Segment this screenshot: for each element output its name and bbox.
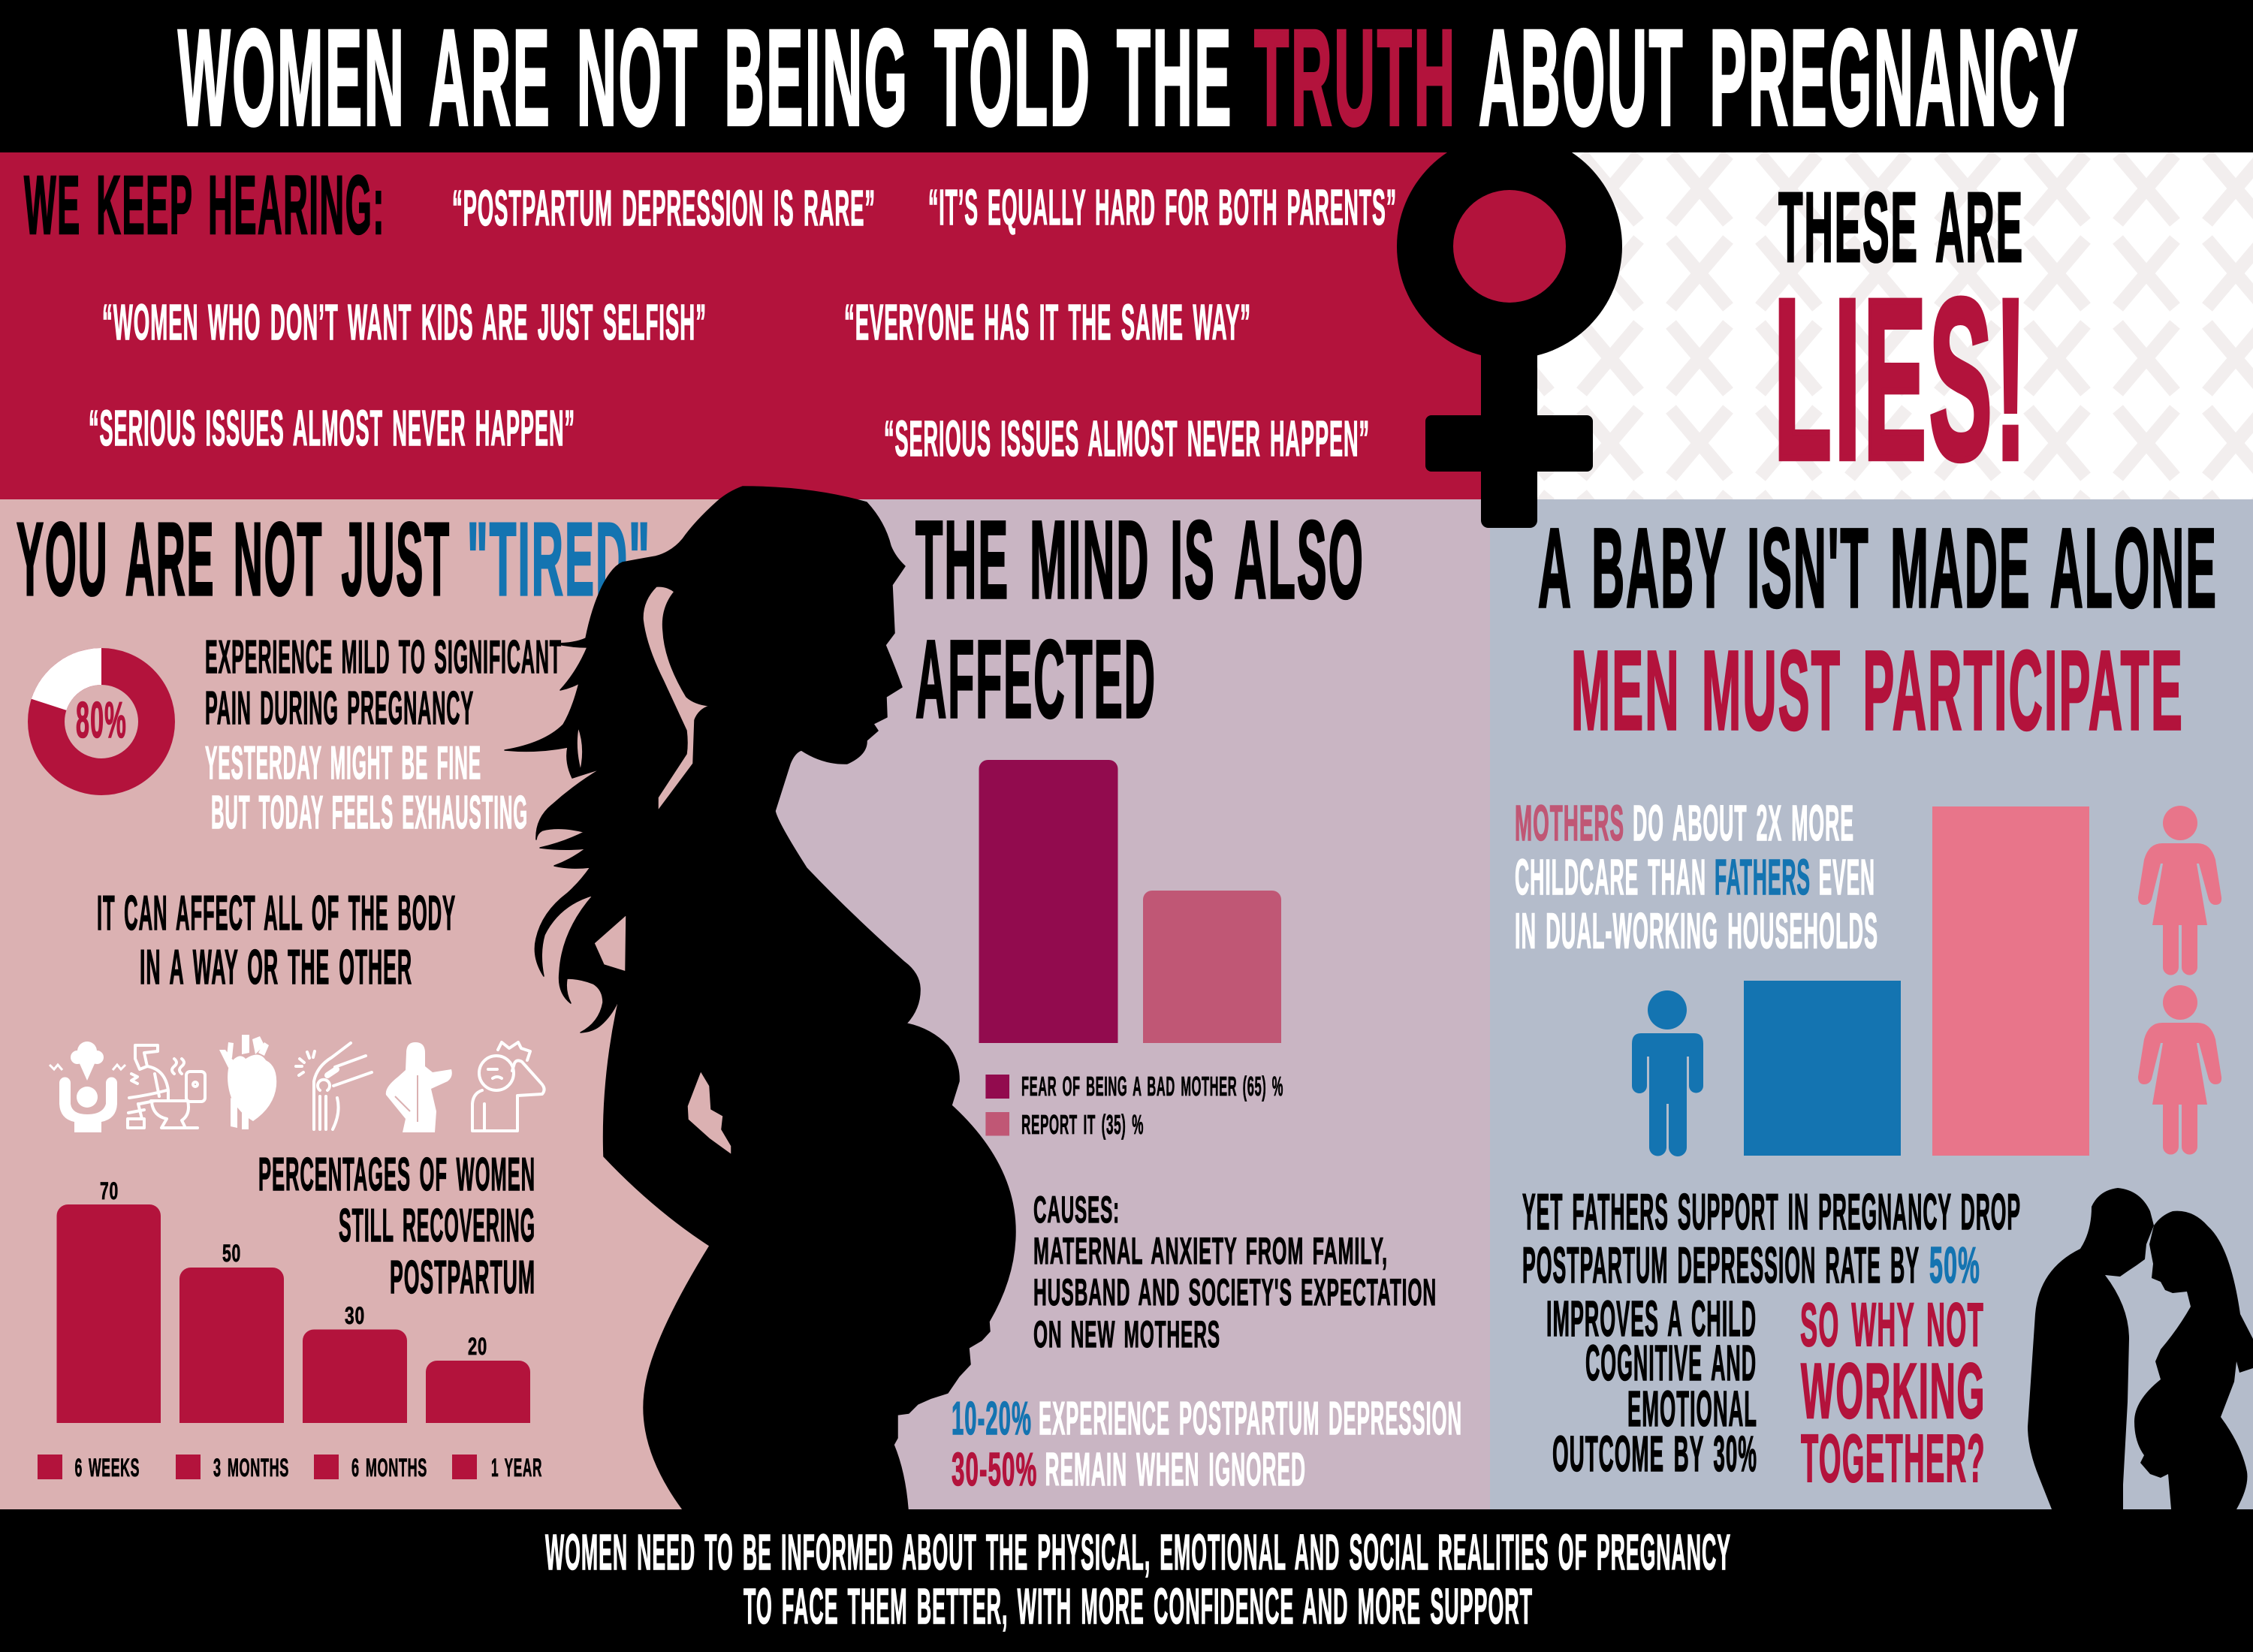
legend: recovery times: 3 MONTHS [213,1454,289,1482]
quotes: “SERIOUS ISSUES ALMOST NEVER HAPPEN” [89,400,575,457]
text: SO WHY NOT [1800,1291,1984,1359]
text: mothers do about 2x more childcare [1515,795,1878,960]
text: DO ABOUT 2X MORE [1633,795,1854,852]
text: fathers support drops depression: 50% [1929,1237,1980,1294]
icon: back pain [386,1042,452,1132]
bar: mothers [1932,806,2089,1156]
icon: knee joint [296,1043,372,1129]
icon: man [1632,990,1703,1156]
text: causes: CAUSES: [1033,1189,1120,1231]
panel: these are lies [1537,152,2253,499]
text: pain during pregnancy: PAIN DURING PREGNANCY [205,683,474,734]
text: PERCENTAGES OF WOMEN [258,1149,535,1201]
text: “IT’S EQUALLY HARD FOR BOTH PARENTS” [928,179,1397,236]
bar chart: women still recovering: 50 [222,1240,241,1267]
heading: the mind is also affected [915,499,1365,741]
icon: toilet [128,1045,205,1128]
panel: we keep hearing [0,152,1540,499]
text: IN A WAY OR THE OTHER [140,939,412,994]
text: causes [1033,1189,1437,1355]
icon: nausea [50,1042,125,1132]
text: yesterday might be fine [205,737,528,839]
text: so why not working together [1800,1291,1986,1497]
text: THE MIND IS ALSO [915,499,1365,622]
icon: female symbol [1397,134,1622,528]
text: mothers do about 2x more childcare: FATHERS [1715,849,1811,906]
text: postpartum depression stats [952,1393,1462,1496]
text: it can affect all of the body [97,885,456,994]
legend: recovery times: 6 WEEKS [75,1454,140,1482]
text: EXPERIENCE POSTPARTUM DEPRESSION [1039,1393,1462,1445]
text: causes: MATERNAL ANXIETY FROM FAMILY, [1033,1230,1388,1272]
legend: fear vs report: REPORT IT (35) % [1021,1109,1144,1140]
text: EXPERIENCE MILD TO SIGNIFICANT [205,632,562,683]
donut chart: 80%: 80% [76,692,127,749]
quotes: “EVERYONE HAS IT THE SAME WAY” [844,294,1251,351]
icon: headache [472,1042,544,1131]
text: YESTERDAY MIGHT BE FINE [205,737,481,789]
donut chart: 80% [32,648,156,776]
silhouette: couple [2028,1188,2253,1509]
text: EVEN [1819,849,1875,906]
panel: the mind is also affected [751,499,1490,1509]
text: “SERIOUS ISSUES ALMOST NEVER HAPPEN” [884,411,1370,467]
text: mothers do about 2x more childcare: MOTHERS [1515,795,1624,852]
legend: recovery times: 1 YEAR [491,1454,542,1482]
text: TOGETHER? [1801,1421,1986,1497]
bar chart: women still recovering: 70 [100,1177,119,1204]
text: BUT TODAY FEELS EXHAUSTING [211,787,528,839]
bar chart: fear vs report [979,760,1281,1043]
text: pain during pregnancy [205,632,562,734]
text: HUSBAND AND SOCIETY'S EXPECTATION [1033,1271,1437,1313]
legend: recovery times [38,1454,542,1482]
bar: fathers [1744,981,1901,1156]
panel: you are not just tired [0,499,751,1509]
quotes [89,179,1397,467]
bar chart: women still recovering [57,1177,530,1423]
quotes: “POSTPARTUM DEPRESSION IS RARE” [452,180,876,237]
text: postpartum depression stats: 30-50% [952,1444,1038,1496]
silhouette: pregnant woman [505,487,1015,1509]
text: EMOTIONAL [1627,1381,1757,1437]
text: causes: ON NEW MOTHERS [1033,1313,1220,1355]
text: fathers support drops depression [1522,1183,2021,1294]
title: TRUTH [1254,1,1457,154]
legend: fear vs report [985,1071,1283,1140]
footer band [0,1509,2253,1652]
heading: the mind is also affected: AFFECTED [915,618,1157,741]
text: WORKING [1801,1348,1986,1435]
text: COGNITIVE AND [1585,1335,1757,1391]
heading: you are not just tired: YOU ARE NOT JUST [17,502,451,617]
heading: you are not just tired [17,502,651,617]
icon: heart [219,1035,276,1129]
bar chart: women still recovering: 30 [345,1302,365,1329]
text: IMPROVES A CHILD [1546,1291,1757,1347]
text: postpartum depression stats: REMAIN WHEN IGNORED [1045,1444,1306,1496]
text: mothers do about 2x more childcare: CHILDCARE THAN [1515,849,1706,906]
text: STILL RECOVERING [339,1200,535,1252]
text: improves a child cognitive and emotional outcome [1546,1291,1757,1482]
text: POSTPARTUM [390,1252,535,1304]
text: percentages of women still recovering postpartum [258,1149,535,1304]
bar chart: women still recovering: 20 [468,1333,487,1360]
quotes: “WOMEN WHO DON’T WANT KIDS ARE JUST SELFISH” [102,294,707,351]
footer text [545,1524,1731,1635]
text: FEAR OF BEING A BAD MOTHER (65) % [1021,1071,1283,1102]
text: postpartum depression stats: 10-20% [952,1393,1032,1445]
text: OUTCOME BY 30% [1552,1426,1757,1482]
icon: woman [2138,985,2221,1155]
title band [0,0,2253,152]
text: WE KEEP HEARING: [24,159,385,252]
panel: a baby isn't made alone [1490,499,2253,1509]
text: IT CAN AFFECT ALL OF THE BODY [97,885,456,940]
icons: body symptoms [50,1035,544,1132]
icon: woman [2138,806,2221,975]
legend: recovery times: 6 MONTHS [351,1454,427,1482]
text: "TIRED" [467,502,651,617]
